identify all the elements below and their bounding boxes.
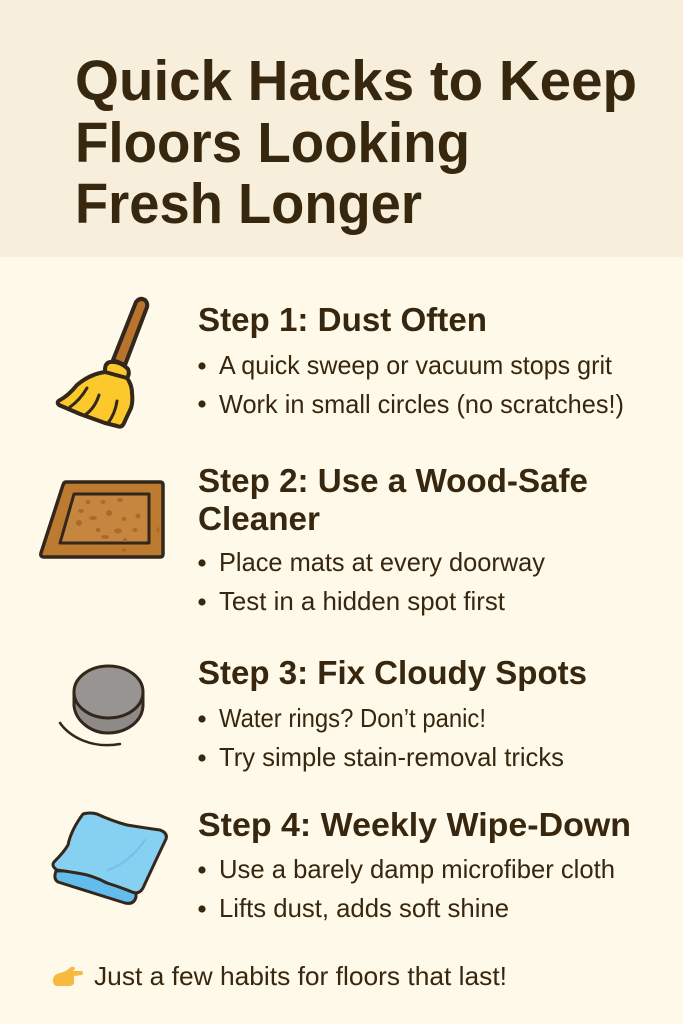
icon: cloudy spot puck bbox=[60, 666, 143, 745]
step 2 text: Test in a hidden spot first bbox=[219, 586, 506, 616]
step 3 text: Water rings? Don’t panic! bbox=[219, 703, 486, 733]
step 3 text: Try simple stain-removal tricks bbox=[219, 742, 564, 772]
step 2 text: Step 2: Use a Wood-Safe bbox=[198, 463, 588, 500]
title: Quick Hacks to Keep bbox=[75, 49, 637, 113]
title bbox=[75, 49, 637, 236]
step 4 text: Step 4: Weekly Wipe-Down bbox=[198, 807, 631, 844]
step 1 text bbox=[198, 302, 624, 419]
icon: doormat bbox=[41, 482, 163, 557]
step 4 text bbox=[198, 807, 631, 923]
step 1 text: A quick sweep or vacuum stops grit bbox=[219, 350, 613, 380]
closing line: Just a few habits for floors that last! bbox=[94, 961, 507, 991]
title: Fresh Longer bbox=[75, 172, 422, 236]
step 4 text: Lifts dust, adds soft shine bbox=[219, 893, 509, 923]
step 2 text: Cleaner bbox=[198, 501, 320, 538]
step 4 text: Use a barely damp microfiber cloth bbox=[219, 854, 615, 884]
step 3 text bbox=[198, 655, 587, 772]
title: Floors Looking bbox=[75, 111, 470, 175]
step 1 text: Work in small circles (no scratches!) bbox=[219, 389, 624, 419]
icon: broom bbox=[58, 299, 147, 427]
step 1 text: Step 1: Dust Often bbox=[198, 302, 487, 339]
step 3 text: Step 3: Fix Cloudy Spots bbox=[198, 655, 587, 692]
icon: pointing hand bbox=[53, 967, 83, 986]
step 2 text bbox=[198, 463, 588, 616]
header band bbox=[0, 0, 683, 257]
icon: microfiber cloth bbox=[53, 813, 166, 903]
step 2 text: Place mats at every doorway bbox=[219, 547, 545, 577]
